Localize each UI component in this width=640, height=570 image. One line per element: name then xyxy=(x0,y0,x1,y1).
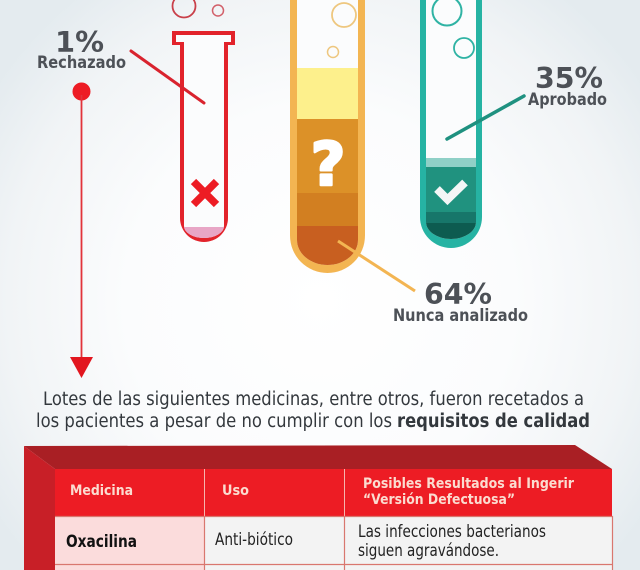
table header row: Uso xyxy=(222,483,249,499)
label: 64% never analysed: 64% xyxy=(424,278,492,311)
leader line: approved xyxy=(447,96,524,139)
intro text: los pacientes a pesar de no cumplir con los xyxy=(36,411,392,432)
table row: Oxacilina: Anti-biótico xyxy=(215,530,293,549)
table row: Oxacilina: siguen agravándose. xyxy=(358,541,499,560)
intro text: requisitos de calidad xyxy=(397,411,590,432)
leader line: never analysed xyxy=(338,241,415,291)
label: 64% never analysed xyxy=(393,278,528,325)
table row: Oxacilina: Oxacilina xyxy=(66,532,137,551)
table xyxy=(24,445,612,570)
table frame xyxy=(24,445,612,570)
intro text xyxy=(36,389,590,432)
teal test tube: approved xyxy=(420,0,482,248)
table header row xyxy=(55,469,612,516)
label: 1% rejected xyxy=(37,26,126,72)
leader line: rejected xyxy=(131,51,204,103)
intro text: Lotes de las siguientes medicinas, entre otros, fueron recetados a xyxy=(43,389,584,410)
label: 1% rejected: 1% xyxy=(55,26,104,59)
red test tube: rejected xyxy=(172,0,235,242)
table header row: Medicina xyxy=(70,483,133,499)
orange test tube: never analysed: ? xyxy=(311,130,345,200)
table row: Oxacilina xyxy=(55,516,612,564)
label: 35% approved: Aprobado xyxy=(528,90,607,109)
label: 1% rejected: Rechazado xyxy=(37,53,126,72)
label: 35% approved xyxy=(528,62,607,109)
table row: next (cropped) xyxy=(55,565,612,570)
label: 64% never analysed: Nunca analizado xyxy=(393,306,528,325)
table header row: “Versión Defectuosa” xyxy=(363,492,515,508)
label: 35% approved: 35% xyxy=(535,62,603,95)
arrow: down to table xyxy=(70,82,93,378)
table header row: Posibles Resultados al Ingerir xyxy=(363,476,575,492)
orange test tube: never analysed xyxy=(290,0,365,273)
table row: Oxacilina: Las infecciones bacterianos xyxy=(358,522,546,541)
